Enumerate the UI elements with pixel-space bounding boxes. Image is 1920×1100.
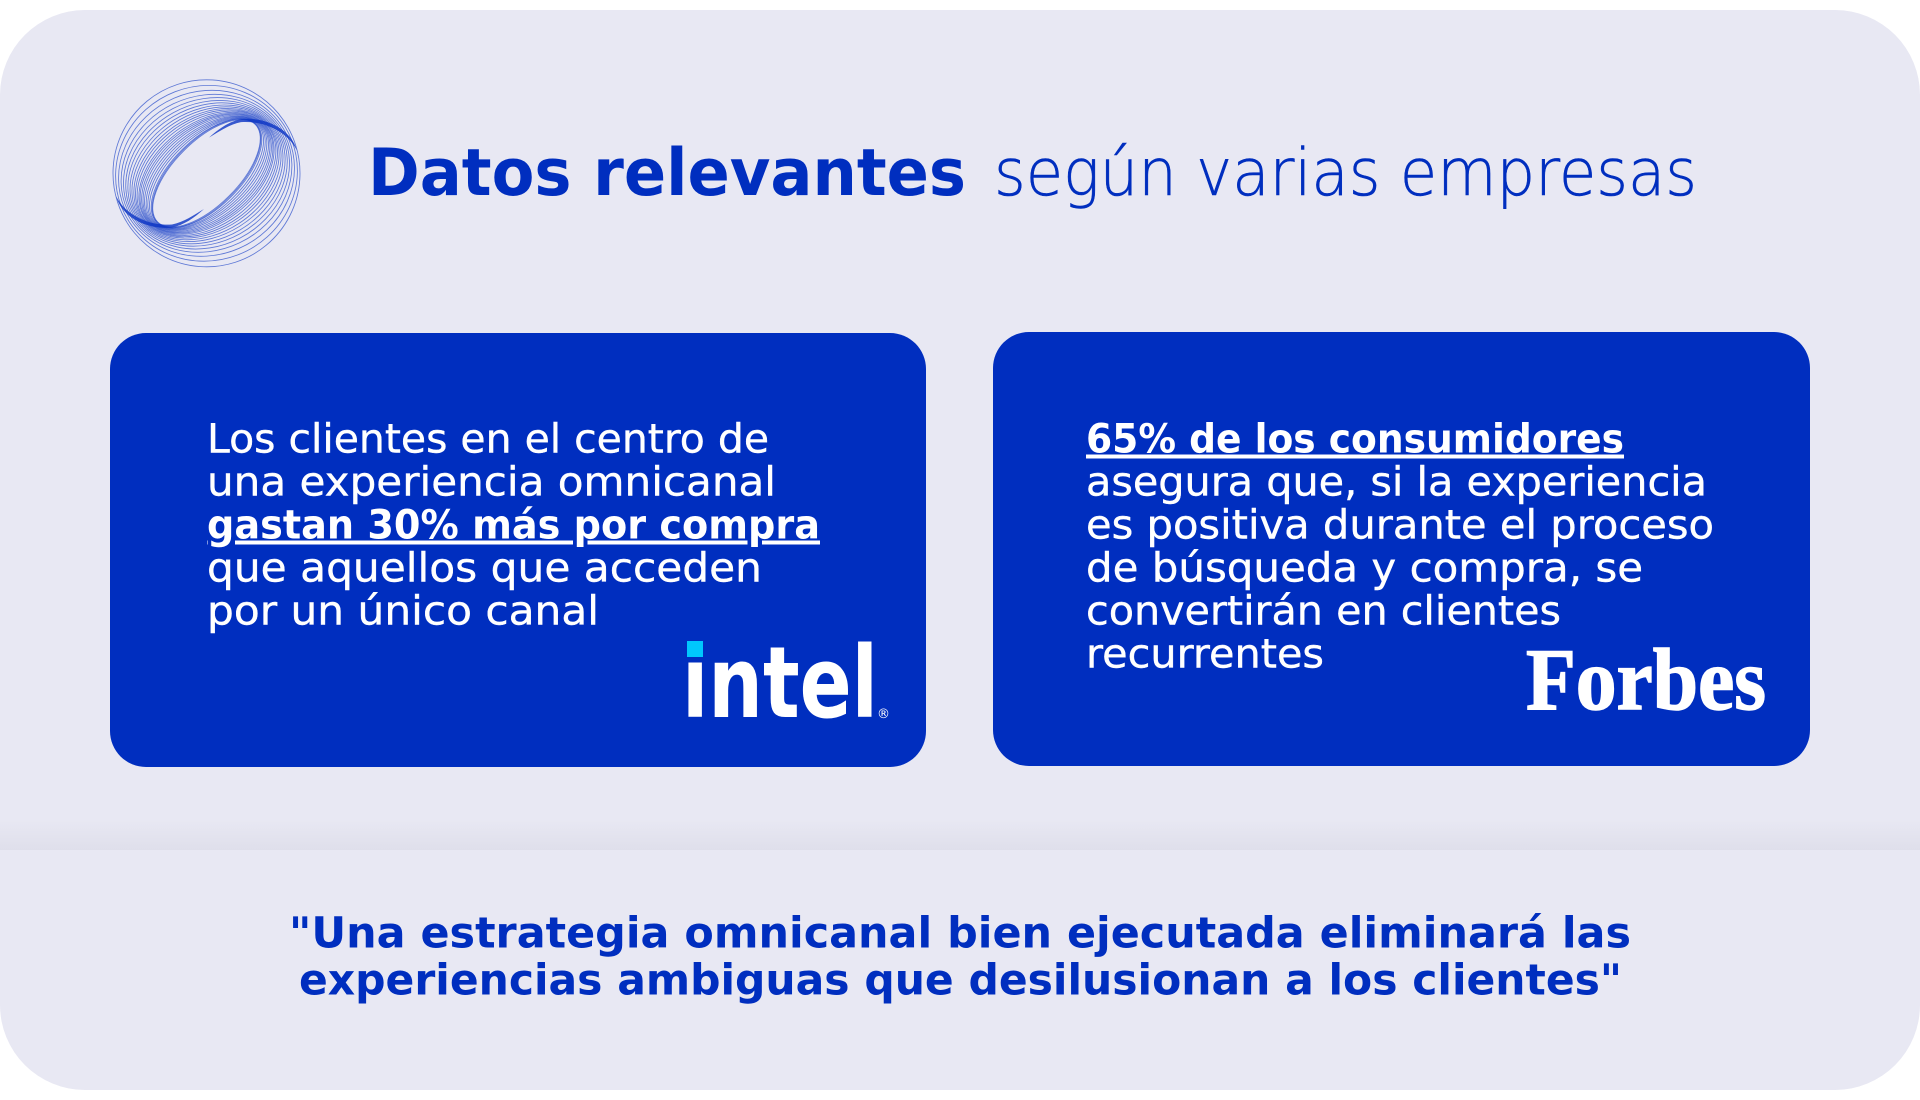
text block: forbes statistic [1086, 416, 1714, 678]
text block: intel statistic: Los clientes en el centro de [207, 416, 769, 462]
quote: "Una estrategia omnicanal bien ejecutada eliminará las [289, 908, 1631, 958]
text block: intel statistic [207, 416, 820, 634]
logo: forbes: Forbes [1526, 632, 1766, 729]
text block: forbes statistic: es positiva durante el proceso [1086, 502, 1714, 548]
panel: forbes [993, 332, 1810, 766]
panel: intel [110, 333, 926, 767]
icon: wire ring [89, 55, 324, 291]
quote [289, 908, 1631, 1006]
title [368, 136, 1697, 211]
text block: forbes statistic: de búsqueda y compra, se [1086, 546, 1643, 592]
logo: intel: ® [877, 707, 890, 722]
text block: forbes statistic: recurrentes [1086, 632, 1324, 678]
text block: forbes statistic: convertirán en clientes [1086, 588, 1561, 634]
text block: intel statistic: por un único canal [207, 588, 599, 634]
text block: intel statistic: gastan 30% más por compra [207, 502, 820, 548]
text block: intel statistic: que aquellos que acceden [207, 546, 762, 592]
text block: intel statistic: una experiencia omnicanal [207, 460, 776, 506]
text block: forbes statistic: asegura que, si la experiencia [1086, 460, 1707, 506]
text block: forbes statistic: 65% de los consumidores [1086, 416, 1624, 462]
title: Datos relevantes [368, 136, 966, 211]
title: según varias empresas [994, 136, 1697, 211]
logo: intel: intel [682, 626, 878, 741]
quote: experiencias ambiguas que desilusionan a los clientes" [299, 956, 1622, 1006]
